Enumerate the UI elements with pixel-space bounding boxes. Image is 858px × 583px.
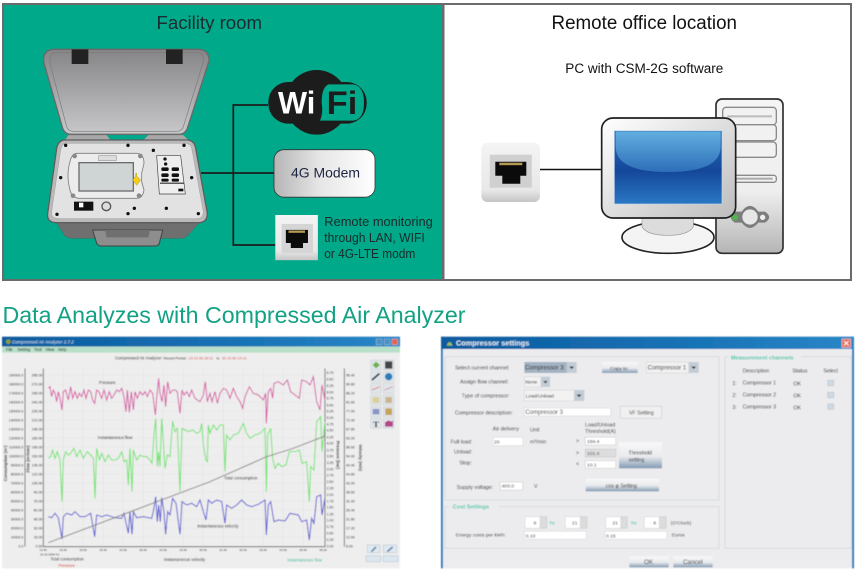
heading: facility room: Facility room xyxy=(156,12,262,33)
group: measurement channels: Compressor 3 xyxy=(743,405,776,411)
pressure axis labels: 2.75 xyxy=(327,474,334,478)
consumption axis labels: 0.0 xyxy=(18,544,23,548)
pressure axis labels: 2.50 xyxy=(327,480,334,484)
consumption axis labels: 50000.0 xyxy=(11,499,23,503)
velocity axis labels: 44.80 xyxy=(346,472,355,476)
group: measurement channels: Description xyxy=(743,368,769,374)
consumption axis labels: 110000.0 xyxy=(9,445,23,449)
time axis labels: 16:30 xyxy=(59,548,67,552)
pressure axis labels: 1.25 xyxy=(327,512,334,516)
panel: compressor settings window xyxy=(441,337,854,568)
time axis labels xyxy=(39,548,327,556)
pressure axis labels: 5.50 xyxy=(327,403,334,407)
group: measurement channels: OK xyxy=(793,393,801,399)
consumption axis labels: 70000.0 xyxy=(11,481,23,485)
time axis labels: 01:30 xyxy=(219,548,227,552)
panel: compressed air analyzer window xyxy=(2,337,400,568)
velocity axis labels: 63.20 xyxy=(346,436,355,440)
pressure axis labels: 4.00 xyxy=(327,442,334,446)
group: cost settings: (O'Clock) xyxy=(671,521,692,527)
pressure axis labels: 3.00 xyxy=(327,467,334,471)
group: compressor parameters: setting xyxy=(629,458,644,464)
pressure axis labels: 3.50 xyxy=(327,455,334,459)
group: measurement channels: OK xyxy=(793,405,801,411)
series: total consumption xyxy=(48,436,325,543)
group: cost settings: 21 xyxy=(572,521,578,527)
group: cost settings: 21 xyxy=(612,521,618,527)
heading: data analyzes: Data Analyzes with Compressed Air Analyzer xyxy=(2,302,466,328)
group: measurement channels: 1: xyxy=(732,381,737,387)
velocity axis labels: 54.00 xyxy=(346,454,355,458)
group: measurement channels: 2: xyxy=(732,393,737,399)
velocity axis labels: 12.60 xyxy=(346,535,355,539)
consumption axis labels: 140000.0 xyxy=(9,418,23,422)
axis titles: Velocity (m/s) xyxy=(358,444,363,472)
time axis labels: 04:30 xyxy=(279,548,287,552)
group: compressor parameters: Compressor 3 xyxy=(525,410,564,416)
velocity axis labels: 31.00 xyxy=(346,499,355,503)
legend: Instantaneous velocity xyxy=(164,557,206,562)
group: compressor parameters: Compressor 3 xyxy=(525,365,564,372)
connection line xyxy=(537,168,602,170)
window title bar: Compressor settings xyxy=(456,339,529,348)
pressure axis labels: 5.25 xyxy=(327,410,334,414)
pressure axis labels: 0.75 xyxy=(327,525,334,529)
flow axis labels: 165.00 xyxy=(32,445,42,449)
icon: wifi logo xyxy=(268,70,367,135)
group: measurement channels: Compressor 2 xyxy=(743,393,776,399)
series: pressure xyxy=(48,377,325,423)
group: compressor parameters xyxy=(445,357,719,500)
flow axis labels: 120.00 xyxy=(32,472,42,476)
group: measurement channels: 3: xyxy=(732,405,737,411)
flow axis labels xyxy=(32,373,42,548)
group: cost settings: To xyxy=(549,521,555,527)
group: compressor parameters: Threshold(A) xyxy=(585,429,616,435)
flow axis labels: 30.00 xyxy=(34,526,42,530)
pressure axis labels: 0.25 xyxy=(327,538,334,542)
panel: remote office xyxy=(444,4,851,280)
group: cost settings: 0.10 xyxy=(526,533,536,539)
time axis labels: 00:30 xyxy=(139,548,147,552)
group: cost settings: Cost Settings xyxy=(453,504,489,510)
chart heading: to xyxy=(217,356,220,360)
4G modem box xyxy=(274,150,375,197)
group: compressor parameters: Assign flow channel: xyxy=(460,380,509,386)
pressure axis labels: 6.25 xyxy=(327,384,334,388)
group: compressor parameters: Compressor description: xyxy=(455,410,513,416)
pressure axis labels: 2.00 xyxy=(327,493,334,497)
group: compressor parameters: VF Setting xyxy=(629,411,654,417)
time axis labels: 22:30 xyxy=(119,548,127,552)
velocity axis labels: 90.80 xyxy=(346,382,355,386)
pressure axis labels: 4.50 xyxy=(327,429,334,433)
group: compressor parameters: Unit xyxy=(530,427,540,433)
flow axis labels: 285.00 xyxy=(32,373,42,377)
consumption axis labels: 40000.0 xyxy=(11,508,23,512)
consumption axis labels: 180000.0 xyxy=(9,382,23,386)
OK button xyxy=(629,556,669,567)
menu bar: Help xyxy=(58,347,67,352)
group: cost settings: Euros xyxy=(672,533,685,539)
series: instantaneous velocity xyxy=(48,495,325,540)
group: compressor parameters: None xyxy=(525,380,537,386)
legend: Pressure xyxy=(58,563,76,568)
flow axis labels: 135.00 xyxy=(32,463,42,467)
velocity axis labels: 86.20 xyxy=(346,391,355,395)
text: remote monitoring: through LAN, WIFI xyxy=(324,231,425,245)
pressure axis labels: 3.75 xyxy=(327,448,334,452)
series labels: Total consumption xyxy=(224,476,258,481)
velocity axis labels: 21.80 xyxy=(346,517,355,521)
flow axis labels: 225.00 xyxy=(32,409,42,413)
pressure axis labels: 1.00 xyxy=(327,519,334,523)
consumption axis labels: 90000.0 xyxy=(11,463,23,467)
icon: wifi logo: Wi xyxy=(278,85,315,120)
series labels: Instantaneous flow xyxy=(98,435,133,440)
time axis labels: 23:30 xyxy=(179,548,187,552)
icon: LAN jack xyxy=(481,143,540,202)
monitor base xyxy=(622,217,714,253)
axis titles: Consumption (m³) xyxy=(3,445,8,481)
pressure axis labels: 1.50 xyxy=(327,506,334,510)
4G modem box: 4G Modem xyxy=(291,166,360,180)
group: compressor parameters: 20 xyxy=(494,439,500,445)
velocity axis labels: 17.20 xyxy=(346,526,355,530)
chart heading: 23 10 09 18:12 xyxy=(189,356,213,360)
group: cost settings: To xyxy=(631,521,636,527)
group: compressor parameters: Stop: xyxy=(459,460,472,466)
consumption axis labels: 20000.0 xyxy=(11,526,23,530)
axis titles: Flow (m³/min) xyxy=(25,445,30,473)
group: measurement channels: OK xyxy=(793,381,801,387)
group: compressor parameters: Select current channel: xyxy=(455,365,509,371)
time axis labels: 18:30 xyxy=(79,548,87,552)
flow axis labels: 75.00 xyxy=(34,499,42,503)
group: compressor parameters: 10.1 xyxy=(587,462,597,468)
pressure axis labels: 6.50 xyxy=(327,377,334,381)
line chart xyxy=(3,368,363,556)
time axis labels: 20:30 xyxy=(99,548,107,552)
axis titles xyxy=(3,441,363,481)
axis titles: Pressure (bar) xyxy=(335,441,340,470)
group: compressor parameters: Air delivery xyxy=(493,426,519,432)
window title bar xyxy=(441,337,854,349)
flow axis labels: 240.00 xyxy=(32,400,42,404)
pressure axis labels: 3.25 xyxy=(327,461,334,465)
group: compressor parameters: Unload: xyxy=(454,450,472,456)
group: compressor parameters: > xyxy=(576,450,579,456)
panel: facility room xyxy=(3,4,443,280)
velocity axis labels: 72.40 xyxy=(346,418,355,422)
group: compressor parameters: Full load: xyxy=(451,439,472,445)
velocity axis labels: 35.60 xyxy=(346,490,355,494)
cancel button: Cancel xyxy=(683,559,703,566)
series: instantaneous flow xyxy=(48,417,325,502)
pressure axis labels xyxy=(327,371,334,548)
icon: wifi logo: Fi xyxy=(327,85,357,121)
window title bar xyxy=(2,337,400,347)
group: cost settings xyxy=(445,503,719,548)
legend: Instantaneous flow xyxy=(287,558,323,563)
consumption axis labels: 170000.0 xyxy=(9,391,23,395)
window title bar: Compressed Air Analyzer 2.7.2 xyxy=(12,339,74,344)
group: cost settings: 6 xyxy=(534,521,537,527)
computer tower xyxy=(716,99,783,253)
time axis labels: 22:30 xyxy=(159,548,167,552)
consumption axis labels: 150000.0 xyxy=(9,409,23,413)
series labels: Pressure xyxy=(99,380,116,385)
pressure axis labels: 6.75 xyxy=(327,371,334,375)
pressure axis labels: 6.00 xyxy=(327,390,334,394)
velocity axis labels: 26.40 xyxy=(346,508,355,512)
group: compressor parameters: cos φ Setting xyxy=(606,483,637,489)
group: compressor parameters: Threshold xyxy=(628,450,652,456)
icon: LAN jack xyxy=(275,215,318,260)
chart heading: Compressed Air Analyzer xyxy=(115,355,162,360)
time axis labels: 03:30 xyxy=(259,548,267,552)
consumption axis labels: 100000.0 xyxy=(9,454,23,458)
pressure axis labels: 2.25 xyxy=(327,487,334,491)
group: measurement channels: Status xyxy=(792,368,808,374)
consumption axis labels xyxy=(9,373,23,548)
consumption axis labels: 30000.0 xyxy=(11,517,23,521)
menu bar: File xyxy=(6,347,13,352)
consumption axis labels: 120000.0 xyxy=(9,436,23,440)
consumption axis labels: 80000.0 xyxy=(11,472,23,476)
pressure axis labels: 1.75 xyxy=(327,499,334,503)
flow axis labels: 150.00 xyxy=(32,454,42,458)
text: remote monitoring: or 4G-LTE modm xyxy=(324,247,415,261)
time axis labels: 00:30 xyxy=(199,548,207,552)
group: measurement channels: Select xyxy=(823,368,839,374)
consumption axis labels: 10000.0 xyxy=(11,535,23,539)
legend xyxy=(50,557,323,568)
series labels xyxy=(98,380,258,529)
flow axis labels: 255.00 xyxy=(32,391,42,395)
group: compressor parameters: Type of compressor: xyxy=(462,393,510,399)
pressure axis labels: 0.00 xyxy=(327,544,334,548)
flow axis labels: 15.00 xyxy=(34,535,42,539)
consumption axis labels: 60000.0 xyxy=(11,490,23,494)
icon: desktop computer xyxy=(602,99,783,253)
pressure axis labels: 5.75 xyxy=(327,397,334,401)
flow axis labels: 90.00 xyxy=(34,490,42,494)
velocity axis labels: 67.80 xyxy=(346,427,355,431)
flow axis labels: 210.00 xyxy=(32,418,42,422)
consumption axis labels: 160000.0 xyxy=(9,400,23,404)
legend: Total consumption xyxy=(50,557,85,562)
group: measurement channels: Compressor 1 xyxy=(743,381,776,387)
group: compressor parameters: Compressor 1 xyxy=(648,365,687,372)
group: measurement channels xyxy=(725,353,852,548)
group: compressor parameters: > xyxy=(576,439,579,445)
velocity axis labels xyxy=(346,373,355,548)
cancel button xyxy=(673,556,713,567)
velocity axis labels: 49.40 xyxy=(346,463,355,467)
flow axis labels: 45.00 xyxy=(34,517,42,521)
flow axis labels: 195.00 xyxy=(32,427,42,431)
flow axis labels: 270.00 xyxy=(32,382,42,386)
text: remote monitoring: Remote monitoring xyxy=(324,215,433,229)
group: cost settings: Energy costs per kWh: xyxy=(456,532,506,538)
OK button: OK xyxy=(644,559,654,566)
chart heading: Record Period: xyxy=(163,356,187,360)
menu bar xyxy=(2,347,400,353)
flow axis labels: 105.00 xyxy=(32,481,42,485)
flow axis labels: 60.00 xyxy=(34,508,42,512)
time axis labels: 05:30 xyxy=(299,548,307,552)
time axis labels: 23.10.2009 Fri xyxy=(40,552,60,556)
group: compressor parameters: 400.0 xyxy=(502,484,514,490)
menu bar: Setting xyxy=(17,347,31,352)
group: compressor parameters: Supply voltage: xyxy=(457,485,493,491)
pressure axis labels: 4.75 xyxy=(327,422,334,426)
icon: analyzer case xyxy=(44,49,209,246)
consumption axis labels: 130000.0 xyxy=(9,427,23,431)
chart heading: 30 10 09 14:13 xyxy=(222,356,246,360)
menu bar: View xyxy=(45,347,55,352)
zoom buttons xyxy=(366,545,398,562)
velocity axis labels: 8.00 xyxy=(346,544,353,548)
group: compressor parameters: Copy to: xyxy=(610,366,629,372)
group: cost settings: 6 xyxy=(653,521,656,527)
velocity axis labels: 40.20 xyxy=(346,481,355,485)
time axis labels: 14:30 xyxy=(39,548,47,552)
connection lines xyxy=(201,105,276,245)
text: PC software: PC with CSM-2G software xyxy=(565,61,723,76)
time axis labels: 06:30 xyxy=(319,548,327,552)
group: compressor parameters: 101.4 xyxy=(587,451,600,457)
group: cost settings: 0.15 xyxy=(606,533,616,539)
group: compressor parameters: < xyxy=(576,462,579,468)
flow axis labels: 180.00 xyxy=(32,436,42,440)
toolbar icons xyxy=(371,360,394,429)
pressure axis labels: 5.00 xyxy=(327,416,334,420)
group: compressor parameters: Load/Unload xyxy=(526,394,554,400)
flow axis labels: 0.00 xyxy=(36,544,42,548)
series labels: Instantaneous velocity xyxy=(197,524,239,529)
heading: remote office location: Remote office location xyxy=(552,13,737,34)
group: compressor parameters: m³/min xyxy=(530,440,546,446)
group: compressor parameters: V xyxy=(534,484,538,490)
velocity axis labels: 95.40 xyxy=(346,373,355,377)
menu bar: Tool xyxy=(34,347,42,352)
group: compressor parameters: 184.4 xyxy=(587,439,600,445)
velocity axis labels: 81.60 xyxy=(346,400,355,404)
velocity axis labels: 58.60 xyxy=(346,445,355,449)
pressure axis labels: 0.50 xyxy=(327,532,334,536)
group: compressor parameters: Load/Unload xyxy=(585,423,615,429)
time axis labels: 02:30 xyxy=(239,548,247,552)
toolbar icons: T xyxy=(373,419,379,429)
group: measurement channels: Measurement channels xyxy=(731,355,794,361)
monitor body xyxy=(602,118,736,218)
velocity axis labels: 77.00 xyxy=(346,409,355,413)
pressure axis labels: 4.25 xyxy=(327,435,334,439)
consumption axis labels: 190000.0 xyxy=(9,373,23,377)
